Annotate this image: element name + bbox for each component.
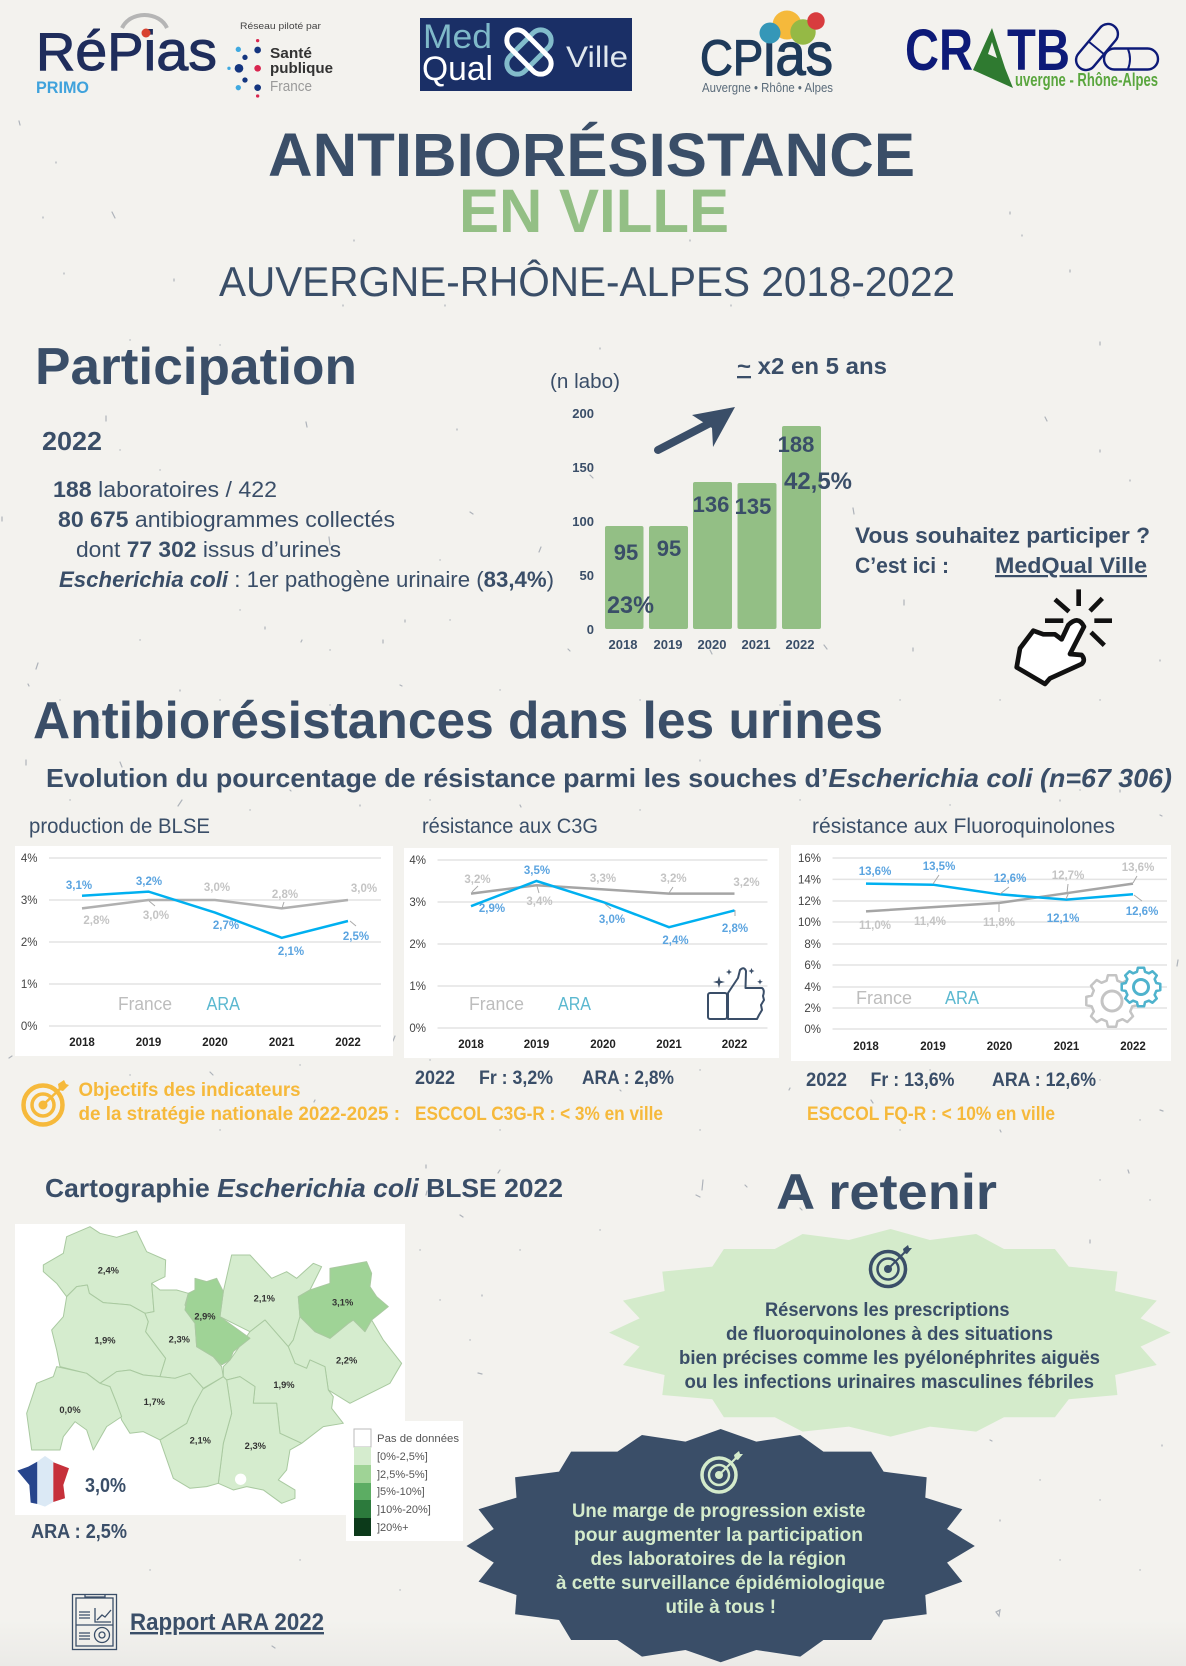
logo: MedQual Ville: Ville (566, 41, 628, 74)
line chart: BLSE: 2% (21, 937, 38, 949)
participation figures 2022: 80 675 antibiogrammes collectés (58, 507, 395, 532)
logo: Santé publique France: Réseau piloté par (240, 21, 321, 32)
line chart: BLSE: 2018 (69, 1037, 95, 1049)
icon: France flag map (17, 1456, 69, 1507)
logo: CRATB: TB (1007, 18, 1070, 83)
bar chart: participating laboratories: 0 (587, 622, 594, 637)
line chart: BLSE: 2,8% (272, 889, 298, 901)
C3G 2022 values: ARA : 2,8% (582, 1068, 674, 1089)
arrow: upward trend (658, 407, 735, 450)
map legend: Pas de données (377, 1433, 460, 1445)
panel: participation message (466, 1429, 975, 1662)
bar chart: participating laboratories: 50 (580, 568, 594, 583)
line chart: C3G: 2,9% (479, 903, 505, 915)
line chart: BLSE: 3,2% (136, 876, 162, 888)
line chart: C3G: 3% (409, 897, 426, 909)
map legend (346, 1421, 463, 1541)
panel: participation message: des laboratoires de la région (590, 1548, 846, 1570)
logo: MedQual Ville: Med (423, 18, 492, 56)
icon: thumbs up (708, 968, 764, 1019)
logo: CPias: Auvergne • Rhône • Alpes (702, 80, 833, 95)
national strategy objectives: ESCCOL C3G-R : < 3% en ville (415, 1104, 663, 1125)
line chart: BLSE: 3,0% (351, 883, 377, 895)
line chart: C3G: 3,2% (660, 873, 687, 885)
national strategy objectives: de la stratégie nationale 2022-2025 : (78, 1104, 400, 1125)
map: Auvergne-Rhône-Alpes BLSE: 2,4% (98, 1265, 120, 1275)
national strategy objectives: Objectifs des indicateurs (78, 1080, 300, 1101)
line chart: fluoroquinolones: 4% (804, 982, 821, 994)
logo: MedQual Ville (420, 18, 632, 91)
call to action: participate: MedQual Ville (995, 553, 1147, 578)
logo: RéPias Primo: RéPias (36, 19, 217, 82)
participation figures 2022 (42, 426, 554, 592)
line chart: fluoroquinolones: 16% (798, 853, 821, 865)
line chart: BLSE: 3,1% (66, 880, 92, 892)
line chart: fluoroquinolones: 12,6% (1126, 906, 1158, 918)
line chart: BLSE: 2,7% (213, 920, 239, 932)
C3G 2022 values: 2022 (415, 1068, 455, 1089)
icon: pointing hand click (1017, 589, 1112, 684)
national strategy objectives (78, 1080, 1055, 1125)
bar chart: participating laboratories: 136 (693, 492, 729, 517)
panel: fluoroquinolones message: bien précises comme les pyélonéphrites aiguës (679, 1347, 1100, 1369)
map legend: [0%-2,5%] (377, 1451, 428, 1463)
icon: report document (72, 1594, 116, 1650)
panel: participation message: pour augmenter la participation (574, 1524, 863, 1546)
line chart: C3G: 2,4% (662, 935, 689, 947)
line chart: fluoroquinolones: 2021 (1054, 1041, 1080, 1053)
line chart: fluoroquinolones: 12,7% (1052, 870, 1084, 882)
logo: Santé publique France (227, 21, 333, 98)
logo: CRATB (905, 18, 1158, 90)
line chart: C3G: France (469, 994, 524, 1014)
line chart: BLSE: 2,1% (278, 946, 304, 958)
line chart: fluoroquinolones: 2% (804, 1003, 821, 1015)
map: Auvergne-Rhône-Alpes BLSE: 0,0% (59, 1405, 81, 1415)
panel: fluoroquinolones message: Réservons les prescriptions (765, 1299, 1010, 1321)
bar chart: participating laboratories: 2021 (742, 637, 770, 652)
map: Auvergne-Rhône-Alpes BLSE: 1,7% (144, 1397, 166, 1407)
line chart: C3G: 2021 (656, 1039, 682, 1051)
line chart: fluoroquinolones: 12,1% (1047, 913, 1079, 925)
bar chart: participating laboratories: 95 (614, 540, 638, 565)
bar chart: participating laboratories: 150 (572, 460, 594, 475)
logo: CPias: CPias (700, 21, 833, 88)
line chart: BLSE: ARA (206, 994, 240, 1014)
line chart: BLSE (15, 846, 393, 1056)
bar chart: participating laboratories: 2019 (654, 637, 682, 652)
map legend: ]10%-20%] (377, 1504, 431, 1516)
line chart: fluoroquinolones: 0% (804, 1024, 821, 1036)
icon: gears (1086, 968, 1160, 1027)
line chart: BLSE: 3% (21, 895, 38, 907)
line chart: C3G: 2020 (590, 1039, 616, 1051)
line chart: C3G: 3,2% (464, 874, 491, 886)
participation figures 2022: dont 77 302 issus d’urines (76, 537, 341, 562)
line chart: BLSE: 1% (21, 979, 38, 991)
line chart: BLSE: 0% (21, 1021, 38, 1033)
line chart: fluoroquinolones: 2022 (1120, 1041, 1146, 1053)
call to action: participate: C’est ici : (855, 553, 949, 578)
line chart: fluoroquinolones: 11,8% (983, 917, 1015, 929)
bar chart: participating laboratories: 42,5% (784, 468, 852, 495)
map legend: ]2,5%-5%] (377, 1469, 428, 1481)
national strategy objectives: ESCCOL FQ-R : < 10% en ville (807, 1104, 1055, 1125)
participation figures 2022: 188 laboratoires / 422 (53, 477, 277, 502)
participation figures 2022: 2022 (42, 426, 102, 456)
line chart: BLSE: 2021 (269, 1037, 295, 1049)
logo: MedQual Ville: Qual (422, 50, 493, 88)
link: Rapport ARA 2022: Rapport ARA 2022 (130, 1609, 324, 1636)
line chart: fluoroquinolones: France (856, 988, 912, 1008)
bar chart: participating laboratories: 2018 (609, 637, 637, 652)
line chart: C3G: 2018 (458, 1039, 484, 1051)
map legend: ]5%-10%] (377, 1486, 425, 1498)
C3G 2022 values: Fr : 3,2% (479, 1068, 553, 1089)
line chart: fluoroquinolones: 13,6% (1122, 862, 1154, 874)
bar chart: participating laboratories: 135 (735, 494, 771, 519)
logo: Santé publique France: publique (270, 60, 333, 77)
map: Auvergne-Rhône-Alpes BLSE: 2,1% (190, 1435, 212, 1445)
France rate: 3,0% (85, 1475, 126, 1497)
line chart: fluoroquinolones: ARA (945, 988, 979, 1008)
line chart: fluoroquinolones: 14% (798, 874, 821, 886)
bar chart: participating laboratories: 200 (572, 406, 594, 421)
line chart: fluoroquinolones: 8% (804, 939, 821, 951)
fluoroquinolones 2022 values: 2022 (806, 1070, 847, 1091)
chart title: production de BLSE: production de BLSE (29, 815, 210, 838)
line chart: C3G: 3,4% (526, 896, 553, 908)
heading: A retenir: A retenir (776, 1164, 997, 1220)
call to action: participate (855, 523, 1150, 578)
line chart: C3G: 4% (409, 855, 426, 867)
panel: fluoroquinolones message (609, 1229, 1171, 1437)
panel: participation message: utile à tous ! (666, 1596, 776, 1618)
bar chart: participating laboratories: 95 (657, 536, 681, 561)
line chart: fluoroquinolones: 2019 (920, 1041, 946, 1053)
line chart: C3G: 0% (409, 1023, 426, 1035)
logo: Santé publique France: Santé (270, 45, 312, 62)
line chart: C3G: 3,3% (590, 873, 616, 885)
title (219, 121, 955, 305)
map: Auvergne-Rhône-Alpes BLSE: 2,1% (254, 1294, 276, 1304)
fluoroquinolones 2022 values (806, 1070, 1096, 1091)
line chart: fluoroquinolones (791, 845, 1171, 1061)
line chart: BLSE: 2,5% (343, 931, 369, 943)
logo: Santé publique France: France (270, 78, 312, 95)
heading: Participation: Participation (35, 338, 357, 396)
icon: orange target (24, 1080, 69, 1124)
line chart: fluoroquinolones: 12% (798, 896, 821, 908)
fluoroquinolones 2022 values: Fr : 13,6% (870, 1070, 955, 1091)
map: Auvergne-Rhône-Alpes BLSE: 2,2% (336, 1355, 358, 1365)
line chart: BLSE: 4% (21, 853, 38, 865)
line chart: BLSE: 2019 (136, 1037, 161, 1049)
line chart: fluoroquinolones: 11,0% (859, 920, 891, 932)
chart title: résistance aux C3G: résistance aux C3G (422, 815, 598, 838)
line chart: C3G: ARA (558, 994, 591, 1014)
C3G 2022 values (415, 1068, 674, 1089)
line chart: C3G: 3,0% (599, 914, 625, 926)
line chart: BLSE: 3,0% (204, 882, 230, 894)
logo: RéPias Primo: PRIMO (36, 78, 89, 97)
line chart: C3G: 2% (409, 939, 426, 951)
bar chart: participating laboratories: 2022 (786, 637, 814, 652)
line chart: BLSE: 2,8% (83, 915, 110, 927)
bar chart: participating laboratories: 188 (778, 432, 814, 457)
line chart: C3G: 2022 (722, 1039, 747, 1051)
bar chart: participating laboratories (550, 371, 852, 652)
heading: Cartographie: Cartographie Escherichia coli BLSE 2022 (45, 1173, 563, 1203)
line chart: C3G: 3,2% (733, 877, 760, 889)
bar chart: participating laboratories: 100 (572, 514, 594, 529)
map: Auvergne-Rhône-Alpes BLSE: 2,3% (245, 1441, 267, 1451)
callout: x2 in 5 years: ~ x2 en 5 ans (737, 353, 887, 379)
line chart: fluoroquinolones: 11,4% (914, 916, 946, 928)
map legend: ]20%+ (377, 1522, 408, 1534)
fluoroquinolones 2022 values: ARA : 12,6% (992, 1070, 1096, 1091)
map: Auvergne-Rhône-Alpes BLSE: 3,1% (332, 1297, 354, 1307)
line chart: C3G: 2019 (524, 1039, 549, 1051)
panel: participation message: à cette surveillance épidémiologique (556, 1572, 885, 1594)
panel: fluoroquinolones message: ou les infections urinaires masculines fébriles (684, 1371, 1094, 1393)
call to action: participate: Vous souhaitez participer ? (855, 523, 1150, 548)
map: Auvergne-Rhône-Alpes BLSE: 2,3% (169, 1334, 191, 1344)
icon: target (702, 1451, 743, 1492)
line chart: C3G (404, 848, 779, 1058)
line chart: BLSE: 3,0% (143, 910, 169, 922)
line chart: fluoroquinolones: 10% (798, 917, 821, 929)
line chart: C3G: 3,5% (524, 865, 550, 877)
line chart: fluoroquinolones: 2018 (853, 1041, 879, 1053)
line chart: fluoroquinolones: 2020 (987, 1041, 1012, 1053)
title: ANTIBIORÉSISTANCE (268, 121, 915, 189)
ARA rate: ARA : 2,5% (31, 1521, 127, 1543)
bar chart: participating laboratories: 2020 (698, 637, 726, 652)
participation figures 2022: Escherichia coli : 1er pathogène urinaire (83,4%) (59, 567, 554, 592)
line chart: fluoroquinolones: 13,5% (923, 861, 955, 873)
heading: Antibiorésistances dans les urines: Antibiorésistances dans les urines (33, 692, 883, 750)
line chart: C3G: 1% (409, 981, 426, 993)
line chart: C3G: 2,8% (722, 923, 748, 935)
line chart: BLSE: 2022 (335, 1037, 361, 1049)
line chart: BLSE: France (118, 994, 172, 1014)
map: Auvergne-Rhône-Alpes BLSE: 1,9% (94, 1335, 116, 1345)
map: Auvergne-Rhône-Alpes BLSE: 1,9% (273, 1380, 295, 1390)
title: AUVERGNE-RHÔNE-ALPES 2018-2022 (219, 258, 955, 305)
title: EN VILLE (459, 177, 729, 245)
map: Auvergne-Rhône-Alpes BLSE (15, 1224, 463, 1541)
logo: CRATB: CR (905, 18, 973, 83)
line chart: fluoroquinolones: 6% (804, 960, 821, 972)
icon: target (870, 1245, 912, 1286)
panel: participation message: Une marge de progression existe (572, 1500, 866, 1522)
bar chart: participating laboratories: 23% (607, 592, 654, 619)
bar chart: participating laboratories: (n labo) (550, 371, 620, 393)
subheading: evolution of resistance: Evolution du pourcentage de résistance parmi les souches d’ Escherichia coli (n=67 306) (46, 763, 1172, 793)
panel: fluoroquinolones message: de fluoroquinolones à des situations (726, 1323, 1053, 1345)
line chart: fluoroquinolones: 12,6% (994, 873, 1026, 885)
chart title: résistance aux Fluoroquinolones: résistance aux Fluoroquinolones (812, 815, 1115, 838)
line chart: BLSE: 2020 (202, 1037, 228, 1049)
line chart: fluoroquinolones: 13,6% (859, 866, 891, 878)
map: Auvergne-Rhône-Alpes BLSE: 2,9% (194, 1312, 216, 1322)
